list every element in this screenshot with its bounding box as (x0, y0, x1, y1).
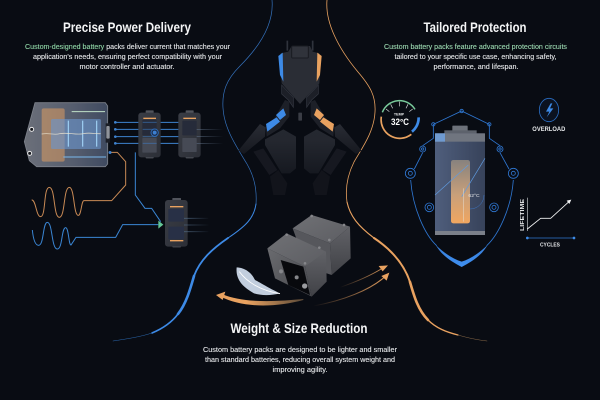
text block: precise power description: application's needs, ensuring perfect compatibility with your (33, 54, 223, 61)
icon: motor module three (165, 198, 208, 247)
icon: overload bolt (539, 98, 559, 122)
heading: Weight and Size Reduction: Weight & Size Reduction (230, 320, 368, 336)
chart: lifetime versus cycles (520, 198, 575, 248)
heading: Precise Power Delivery: Precise Power Delivery (63, 19, 191, 35)
arrow: orange weight reduction sweep (216, 292, 303, 305)
illustration: main battery pack (24, 103, 110, 167)
icon: temperature gauge: TEMP (394, 112, 405, 116)
connectors: blue feed lines to motor modules (114, 121, 182, 144)
curve: blue left divider (113, 0, 272, 341)
icon: temperature gauge (381, 101, 419, 138)
curve: orange right divider (327, 0, 487, 341)
icon: temperature gauge: 32°C (391, 117, 409, 127)
icon: green arrow marker (158, 221, 163, 229)
text block: weight and size description: than standard batteries, reducing overall system weight and (205, 357, 395, 364)
text block: weight and size description (203, 347, 398, 374)
icon: connector node (108, 151, 112, 154)
illustration: protective shield with battery: 62°C (468, 193, 480, 199)
text block: weight and size description: Custom battery packs are designed to be lighter and smaller (203, 347, 398, 354)
chart: lifetime versus cycles: CYCLES (540, 242, 560, 248)
illustration: compact battery cubes (267, 215, 351, 297)
text block: tailored protection description: tailored to your specific use case, enhancing safety, (394, 54, 557, 61)
heading: Tailored Protection: Tailored Protection (424, 19, 526, 35)
text block: weight and size description: improving agility. (272, 367, 328, 374)
icon: motor module two (178, 110, 201, 158)
wave: blue current signal (32, 222, 158, 249)
text block: tailored protection description: Custom battery packs feature advanced protection circuits (384, 44, 567, 51)
arrow: lower right reduction arrow (313, 273, 389, 306)
illustration: protective shield with battery (405, 109, 518, 267)
connectors: faded output lines (197, 129, 223, 143)
text block: precise power description (25, 44, 231, 71)
connector: module one to module three (135, 152, 161, 222)
text block: tailored protection description: performance, and lifespan. (434, 64, 519, 71)
chart: lifetime versus cycles: LIFETIME (520, 198, 526, 231)
illustration: robot bust (238, 41, 362, 195)
wave: orange current signal (32, 152, 126, 217)
text block: precise power description: motor controller and actuator. (80, 64, 175, 71)
icon: motor module one (138, 110, 161, 158)
text block: precise power description: Custom-designed battery packs deliver current that matches your (25, 44, 231, 51)
icon: feather (237, 267, 280, 295)
arrow: upper right reduction arrow (340, 265, 388, 287)
label: overload: OVERLOAD (532, 126, 566, 133)
text block: tailored protection description (384, 44, 567, 71)
